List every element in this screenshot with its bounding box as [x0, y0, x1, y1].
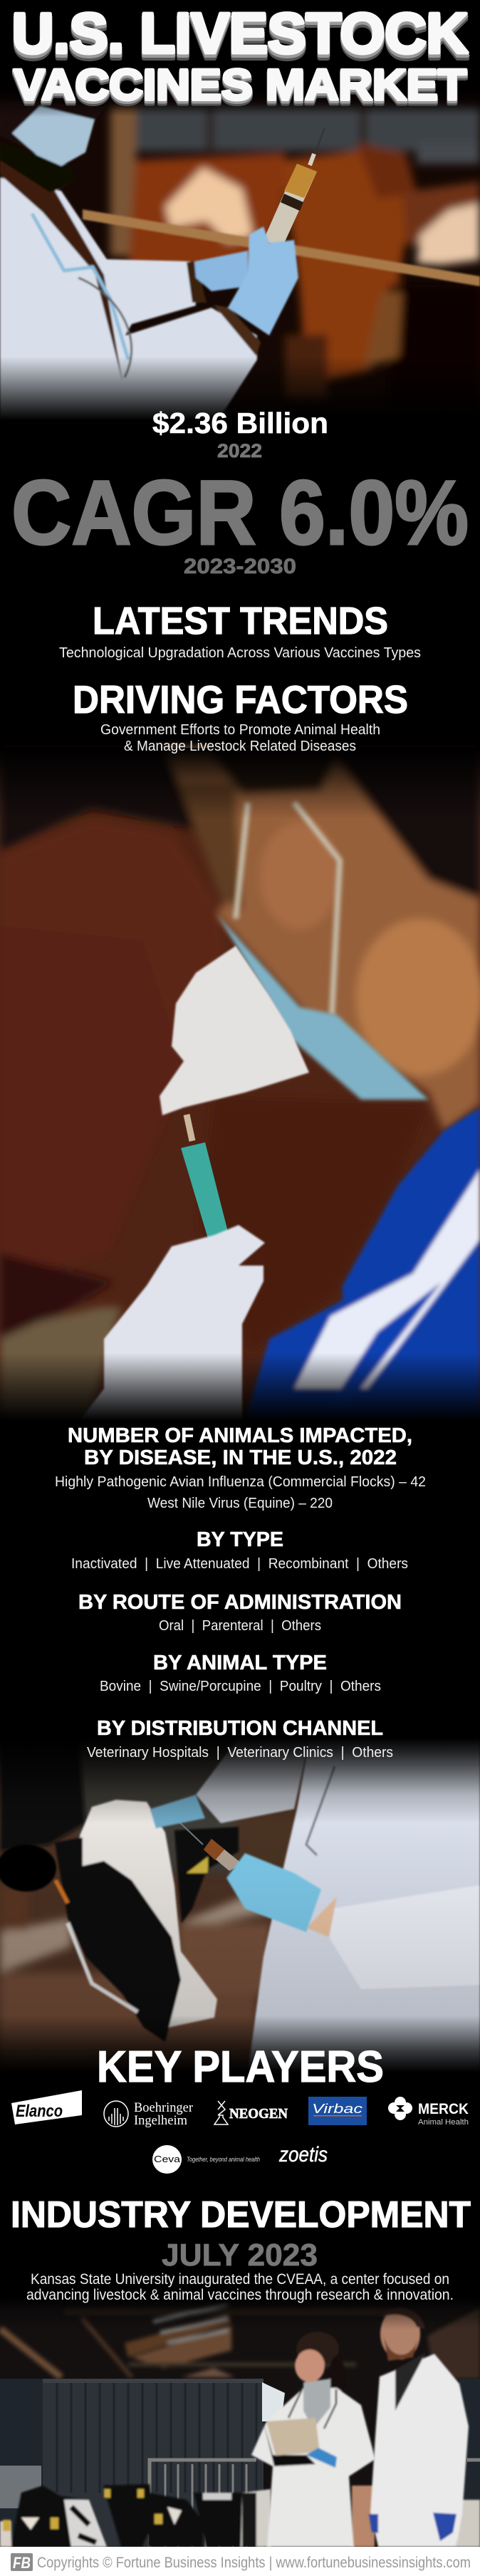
title: [12, 1, 468, 113]
title line 1: U.S. LIVESTOCK: [12, 1, 468, 65]
industry development: advancing livestock & animal vaccines through research & innovation.: [26, 2287, 454, 2303]
logo: Merck Animal Health: [388, 2097, 469, 2127]
segment: by route of administration: [78, 1591, 402, 1634]
driving factors: [73, 677, 408, 754]
title line 2: VACCINES MARKET: [14, 61, 466, 109]
vet coat: [0, 100, 298, 427]
face mask: [217, 914, 429, 1100]
latest trends: LATEST TRENDS: [93, 600, 388, 642]
market size stat: $2.36 Billion: [152, 407, 328, 439]
logo: Ceva: [152, 2145, 260, 2174]
logo: zoetis: zoetis: [278, 2143, 328, 2166]
footer: [0, 2547, 480, 2576]
segment: by route of administration: Oral | Parenteral | Others: [159, 1618, 321, 1634]
title line 2: VACCINES MARKET: [14, 65, 466, 113]
segment: by distribution channel: Veterinary Hospitals | Veterinary Clinics | Others: [87, 1745, 393, 1761]
woman vet: [251, 2332, 375, 2547]
segment: by type: BY TYPE: [197, 1528, 283, 1551]
logo: Boehringer Ingelheim: Ingelheim: [134, 2113, 187, 2128]
segment: by type: Inactivated | Live Attenuated | Recombinant | Others: [71, 1556, 408, 1572]
vet coat: [196, 1738, 480, 2072]
logo: Ceva: Ceva: [154, 2154, 181, 2164]
logo: Virbac: [308, 2097, 367, 2125]
industry development: Kansas State University inaugurated the CVEAA, a center focused on: [31, 2271, 449, 2288]
syringe: [264, 128, 325, 248]
upper glove: [160, 946, 309, 1115]
market size stat: [152, 407, 328, 462]
animals impacted by disease: [55, 1424, 426, 1511]
logo: Elanco: [11, 2090, 82, 2124]
industry development: INDUSTRY DEVELOPMENT: [11, 2194, 471, 2236]
industry development: JULY 2023: [162, 2238, 318, 2273]
market size stat: 2022: [217, 440, 262, 462]
animals impacted by disease: BY DISEASE, IN THE U.S., 2022: [84, 1446, 397, 1469]
key players heading: KEY PLAYERS: [97, 2043, 384, 2092]
title line 1: U.S. LIVESTOCK: [12, 7, 468, 71]
mask straps: [236, 803, 340, 1015]
man vet: [369, 2308, 469, 2547]
gloves: [150, 1795, 321, 1932]
logo: Virbac: Virbac: [312, 2102, 362, 2116]
latest trends: [59, 600, 421, 661]
logo: Boehringer Ingelheim: [104, 2100, 194, 2128]
logo: Merck Animal Health: MERCK: [418, 2101, 469, 2117]
logo: Neogen: NEOGEN: [229, 2106, 288, 2122]
logo: Elanco: Elanco: [16, 2102, 63, 2121]
syringe: [174, 1818, 242, 1871]
segment: by animal type: [100, 1652, 381, 1694]
logo: Neogen: [214, 2101, 288, 2124]
animals impacted by disease: Highly Pathogenic Avian Influenza (Commercial Flocks) – 42: [55, 1474, 426, 1490]
CAGR stat: 2023-2030: [184, 555, 296, 578]
driving factors: DRIVING FACTORS: [73, 677, 408, 721]
photo: vets in cattle barn: [0, 2297, 480, 2550]
photo: vet vaccinating dairy cow: [0, 1727, 480, 2087]
segment: by type: [71, 1528, 408, 1572]
segment: by distribution channel: BY DISTRIBUTION CHANNEL: [97, 1717, 383, 1740]
driving factors: & Manage Livestock Related Diseases: [124, 739, 356, 754]
cow head: [0, 1800, 239, 2042]
latest trends: Technological Upgradation Across Various Vaccines Types: [59, 645, 421, 661]
lower glove: [71, 1225, 265, 1432]
logo: Boehringer Ingelheim: Boehringer: [134, 2100, 194, 2115]
driving factors: Government Efforts to Promote Animal Health: [100, 722, 380, 738]
segment: by distribution channel: [87, 1717, 393, 1761]
icon: Fortune Business Insights logo: FB: [13, 2554, 31, 2572]
calves: [0, 2484, 480, 2547]
photo: vet holding syringe beside cattle: [0, 89, 480, 442]
fence: [150, 2460, 480, 2547]
title line 2: VACCINES MARKET: [14, 63, 466, 111]
animals impacted by disease: NUMBER OF ANIMALS IMPACTED,: [68, 1424, 412, 1447]
logos: [11, 2090, 469, 2174]
logo: Ceva: Together, beyond animal health: [187, 2156, 260, 2164]
segment: by route of administration: BY ROUTE OF ADMINISTRATION: [78, 1591, 402, 1614]
industry development: [11, 2194, 471, 2303]
blue jacket: [242, 1107, 480, 1432]
logo: Merck Animal Health: Animal Health: [418, 2118, 469, 2127]
photo: vet vaccinating horse: [0, 748, 480, 1446]
segment: by animal type: BY ANIMAL TYPE: [153, 1652, 327, 1674]
segment: by animal type: Bovine | Swine/Porcupine | Poultry | Others: [100, 1679, 381, 1694]
title line 1: U.S. LIVESTOCK: [12, 4, 468, 68]
animals impacted by disease: West Nile Virus (Equine) – 220: [147, 1496, 333, 1511]
teal syringe: [181, 1115, 239, 1281]
